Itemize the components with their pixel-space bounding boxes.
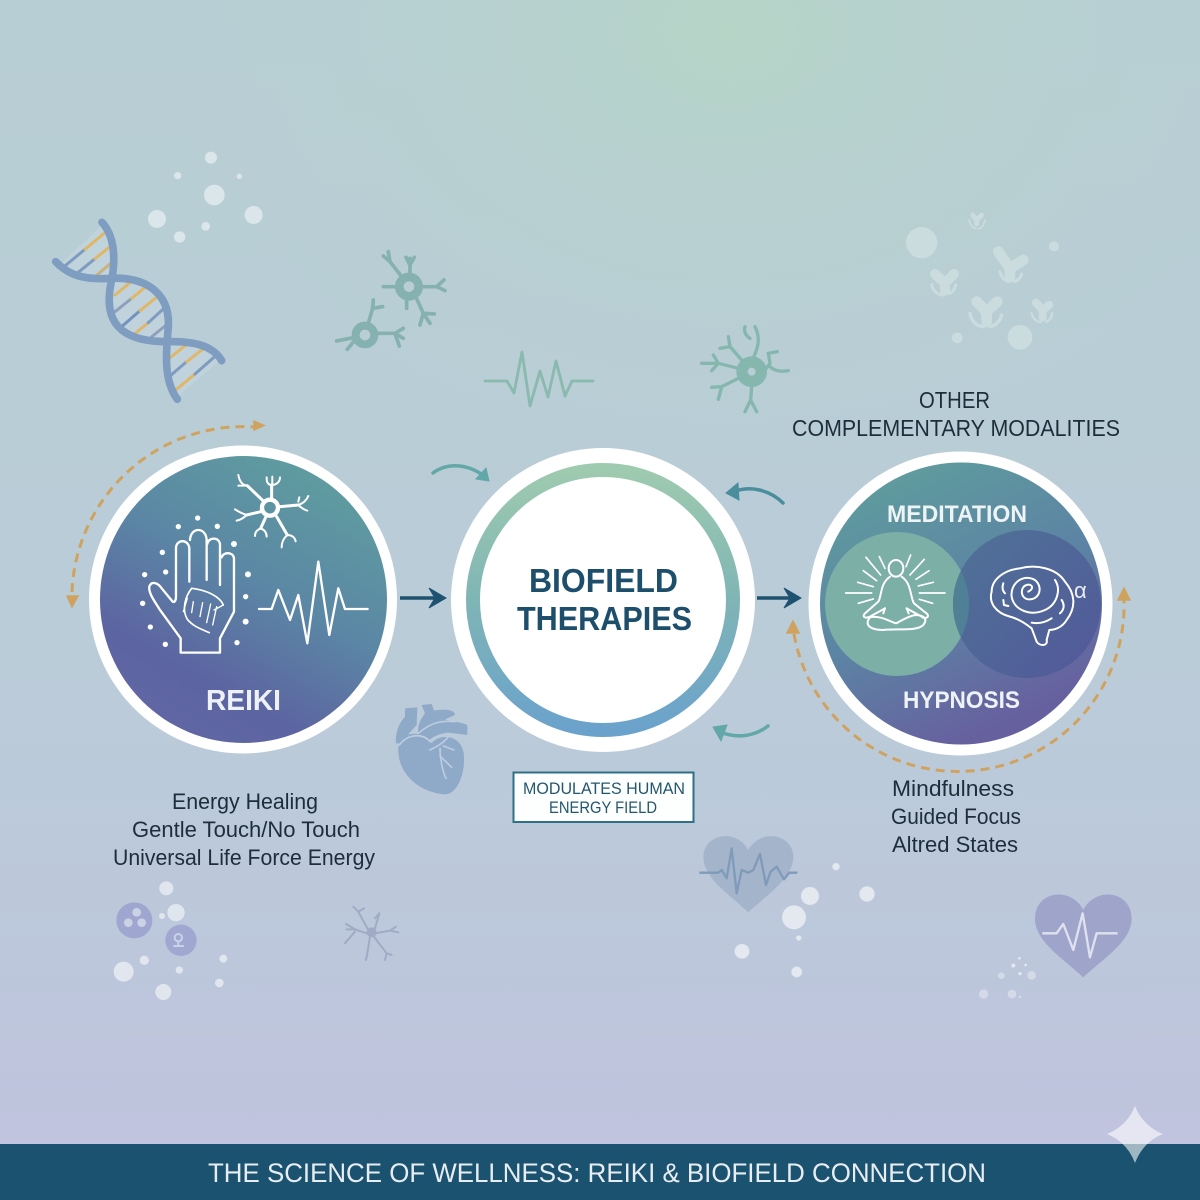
icon: neuron pair xyxy=(337,252,445,349)
icon: meditating figure xyxy=(846,555,945,630)
overlap of circles xyxy=(953,571,969,637)
icon: brain with spiral xyxy=(991,567,1073,645)
heading: other complementary modalities xyxy=(792,387,1120,441)
arrow: teal curve top right xyxy=(726,483,783,503)
icon: heart with ECG xyxy=(699,836,797,912)
heading: other complementary modalities: COMPLEMENTARY MODALITIES xyxy=(792,415,1120,441)
icon: DNA helix xyxy=(56,222,222,399)
text block: reiki descriptors xyxy=(113,789,375,870)
heading: biofield therapies: BIOFIELD xyxy=(529,562,678,599)
icon: faint neuron xyxy=(345,907,398,960)
callout: modulates human energy field: ENERGY FIELD xyxy=(549,798,657,817)
icon: sparkle star xyxy=(1107,1106,1163,1163)
arrow: biofield to other modalities xyxy=(757,588,801,608)
dashed arc: other modalities xyxy=(787,588,1130,771)
icon: heart with ECG lavender xyxy=(1035,895,1132,977)
icon: large neuron xyxy=(702,327,788,412)
label: reiki: REIKI xyxy=(206,685,281,717)
text block: reiki descriptors: Universal Life Force Energy xyxy=(113,845,375,870)
icon: hand with leaf and energy dots xyxy=(140,515,251,653)
footer band xyxy=(0,1144,1200,1200)
text block: modalities descriptors: Guided Focus xyxy=(891,804,1021,829)
label: meditation: MEDITATION xyxy=(887,501,1027,528)
footer title: THE SCIENCE OF WELLNESS: REIKI & BIOFIELD CONNECTION xyxy=(208,1158,986,1188)
panel: reiki xyxy=(89,446,397,754)
icon: ECG wave xyxy=(259,562,368,643)
bubbles: bottom right xyxy=(735,863,1036,999)
callout: modulates human energy field xyxy=(514,772,694,822)
heading: biofield therapies: THERAPIES xyxy=(517,600,692,637)
heading: other complementary modalities: OTHER xyxy=(919,387,990,413)
arrow: reiki to biofield xyxy=(400,588,446,608)
label: hypnosis: HYPNOSIS xyxy=(903,687,1020,714)
text block: modalities descriptors xyxy=(891,776,1021,857)
text block: modalities descriptors: Mindfulness xyxy=(892,776,1014,801)
text block: modalities descriptors: Altred States xyxy=(892,832,1018,857)
symbol: alpha: α xyxy=(1074,578,1087,603)
heading: biofield therapies xyxy=(517,562,692,637)
text block: reiki descriptors: Energy Healing xyxy=(172,789,318,814)
icon: antibody cluster xyxy=(906,215,1059,350)
circle: meditation xyxy=(825,532,969,676)
callout: modulates human energy field: MODULATES HUMAN xyxy=(523,779,685,798)
bubbles and cell icons: bottom left xyxy=(114,881,227,1000)
icon: anatomical heart xyxy=(396,704,467,794)
arrow: teal curve top left xyxy=(433,466,489,481)
panel: other modalities xyxy=(808,452,1112,756)
circle: hypnosis xyxy=(953,530,1101,678)
icon: small ECG wave xyxy=(485,352,593,406)
dashed arc: reiki xyxy=(67,421,264,607)
bubbles: top left xyxy=(148,152,263,243)
panel: biofield therapies xyxy=(451,448,755,752)
icon: neuron xyxy=(235,475,308,547)
arrow: teal curve bottom right xyxy=(713,725,768,741)
text block: reiki descriptors: Gentle Touch/No Touch xyxy=(132,817,360,842)
